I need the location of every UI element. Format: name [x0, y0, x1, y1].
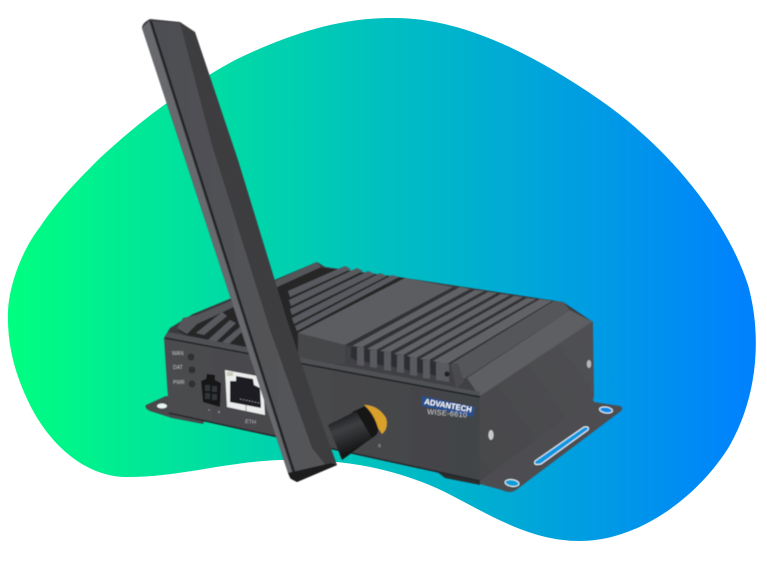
left mounting flange: [146, 396, 205, 424]
gold ring: [364, 405, 387, 434]
top surface: [164, 262, 593, 397]
rear fins: [196, 266, 399, 344]
side panel: [480, 321, 594, 481]
indicator dots: [208, 409, 220, 413]
Advantech logo: ADVANTECH: [424, 397, 473, 414]
fin end faces: [357, 347, 449, 382]
SMA antenna connector: a: [378, 443, 381, 449]
front panel: [164, 332, 480, 481]
rear left ridge: [177, 262, 321, 334]
status LEDs: [187, 353, 196, 388]
front fins: [352, 287, 552, 364]
ethernet port: [225, 370, 265, 415]
plate front face: [298, 333, 345, 365]
LED labels: PWR: [173, 380, 185, 386]
antenna: [142, 19, 337, 482]
gateway device: [142, 19, 622, 492]
connector body: [328, 411, 372, 460]
antenna left edge: [150, 21, 295, 472]
model label: WISE-6610: [427, 407, 467, 419]
LED labels: DAT: [173, 365, 183, 371]
fin channel floor: [345, 287, 553, 364]
LED labels: WAN: [172, 351, 184, 357]
screws: [587, 360, 591, 368]
flat heat-sink plate: [298, 278, 453, 345]
flange slot: [535, 427, 588, 465]
SMA antenna connector: [328, 405, 387, 460]
antenna front face: [150, 21, 328, 476]
ETH label: ETH: [245, 419, 256, 426]
LED labels: [172, 351, 185, 386]
power connector: [201, 374, 221, 407]
right mounting flange: [435, 390, 622, 492]
right ridge: [451, 301, 570, 384]
knurled collar: [352, 406, 378, 441]
fin gaps: [351, 347, 436, 376]
